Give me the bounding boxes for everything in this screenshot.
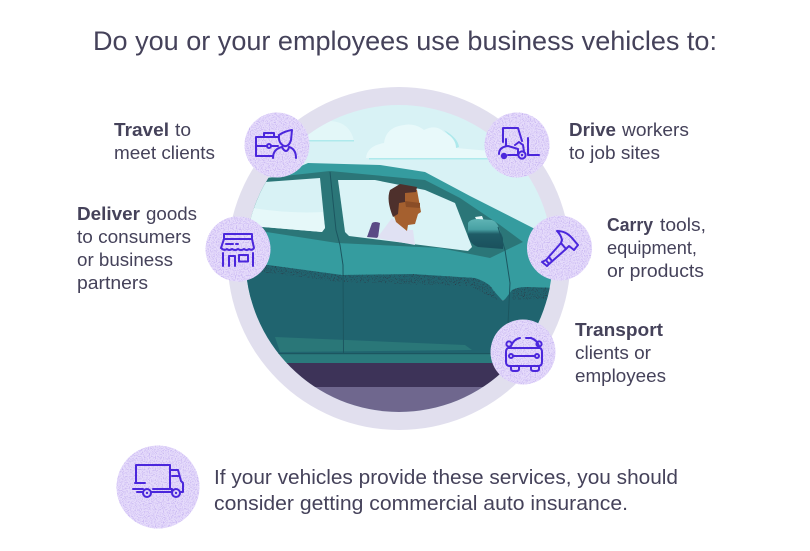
text: deliver: Deliver [77, 203, 140, 224]
rear window [250, 178, 325, 232]
mirror [468, 216, 503, 249]
scene: car and sky [240, 100, 560, 420]
clouds [300, 121, 490, 160]
text: conclusion: consider getting commercial auto insurance. [214, 492, 628, 515]
car body [240, 163, 560, 300]
door highlight [275, 337, 472, 352]
text: drive: Drive [569, 119, 616, 140]
text: travel [114, 119, 215, 163]
sill [278, 353, 492, 364]
text: conclusion: If your vehicles provide these services, you should [214, 466, 678, 489]
icon: hammer [527, 216, 592, 280]
icon: store [206, 216, 270, 282]
text: carry: equipment, [607, 237, 697, 258]
text: travel: meet clients [114, 142, 215, 163]
icon: travel [244, 112, 310, 178]
text: travel: to [175, 119, 191, 140]
text: transport: Transport [575, 319, 663, 340]
door lines [330, 172, 344, 353]
text: transport [575, 319, 666, 386]
icon: car [490, 320, 556, 384]
text: conclusion [214, 466, 678, 515]
seat [367, 222, 380, 238]
title: Do you or your employees use business vehicles to: [93, 26, 717, 56]
text: transport: clients or [575, 342, 651, 363]
ring [228, 87, 570, 430]
front window [338, 180, 472, 251]
text: carry [607, 214, 706, 281]
text: drive [569, 119, 689, 163]
text: drive: to job sites [569, 142, 660, 163]
icon: forklift [484, 112, 550, 178]
road [286, 363, 500, 387]
icon: delivery truck [116, 446, 200, 528]
text: deliver: or business [77, 249, 173, 270]
text: carry: tools, [660, 214, 706, 235]
illustration: driver in car inside ring [228, 87, 570, 430]
text: deliver: partners [77, 272, 148, 293]
driver [377, 184, 421, 245]
text: deliver: goods [146, 203, 197, 224]
lower door panel [240, 262, 560, 353]
text: carry: Carry [607, 214, 654, 235]
text: deliver: to consumers [77, 226, 191, 247]
text: drive: workers [621, 119, 689, 140]
text: transport: employees [575, 365, 666, 386]
window frame [240, 171, 523, 258]
text: travel: Travel [114, 119, 169, 140]
text: deliver [77, 203, 197, 293]
text: carry: or products [607, 260, 704, 281]
